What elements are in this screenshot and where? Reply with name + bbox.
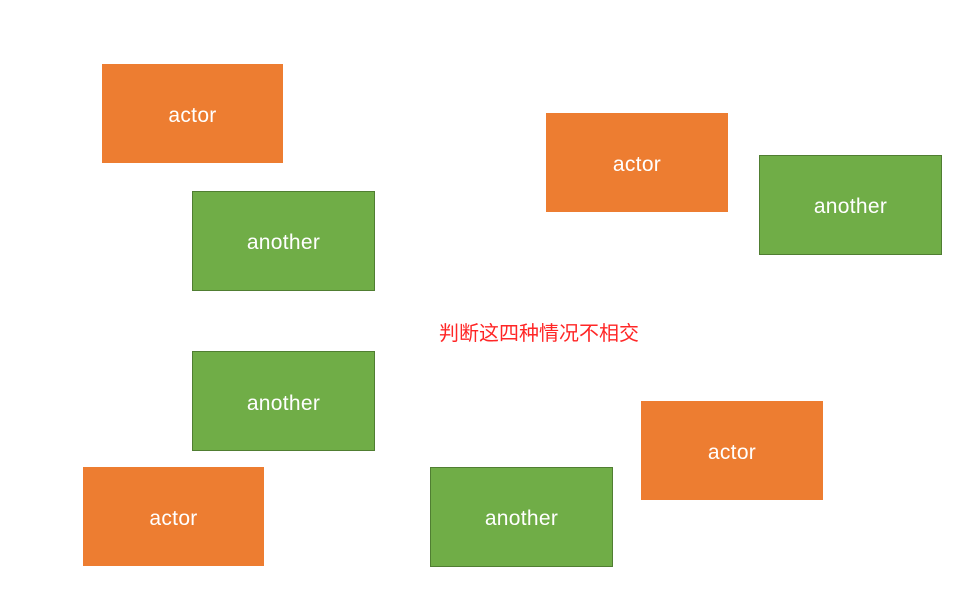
box: another bottom left (192, 351, 375, 451)
box: actor top left (102, 64, 283, 163)
box: another bottom left: another (247, 392, 320, 415)
box: actor bottom left: actor (149, 506, 198, 530)
box: actor bottom right: actor (708, 440, 756, 464)
box: another top right (759, 155, 942, 255)
box: another top left: another (247, 231, 320, 254)
box: another bottom right: another (485, 507, 558, 530)
caption: non-intersecting cases: 判断这四种情况不相交 (439, 317, 639, 346)
box: actor top right (546, 113, 728, 212)
box: another bottom right (430, 467, 613, 567)
box: actor bottom right (641, 401, 823, 500)
box: actor top left: actor (168, 104, 217, 126)
box: another top left (192, 191, 375, 291)
box: another top right: another (814, 195, 887, 218)
box: actor top right: actor (613, 152, 661, 176)
box: actor bottom left (83, 467, 264, 566)
